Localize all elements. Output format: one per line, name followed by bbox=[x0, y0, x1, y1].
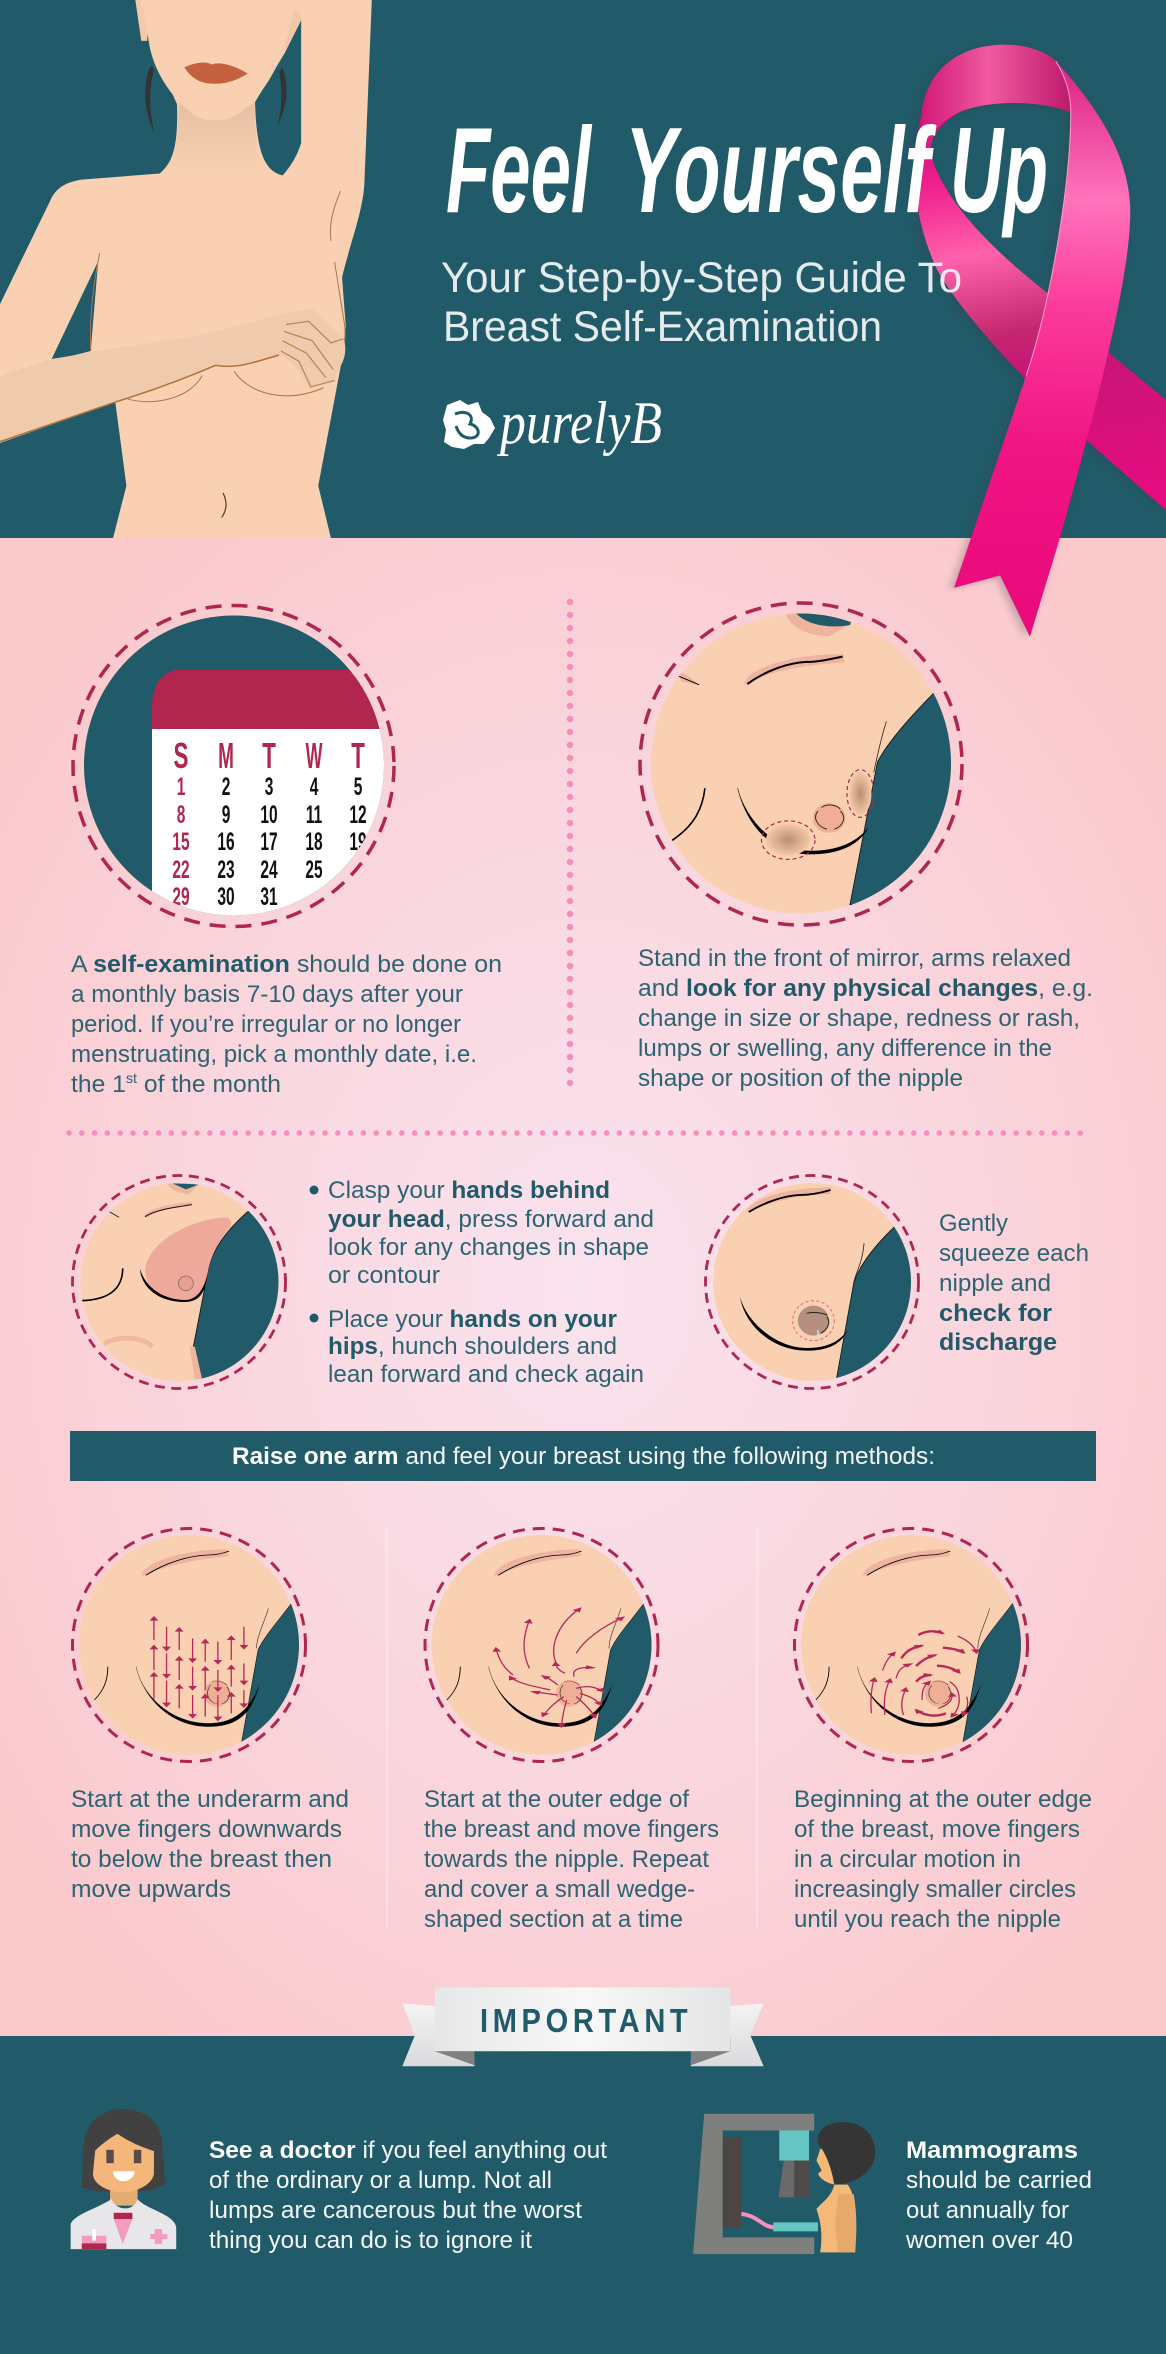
text: circular method: until you reach the nipple bbox=[794, 1906, 1061, 1933]
title: Feel bbox=[446, 102, 592, 238]
text: self-examination: menstruating, pick a monthly date, i.e. bbox=[71, 1041, 477, 1068]
ribbon bbox=[915, 45, 1166, 637]
text: self-examination: a monthly basis 7-10 days after your bbox=[71, 981, 463, 1008]
icon: mammogram machine bbox=[693, 2114, 875, 2254]
dashed ring bbox=[73, 606, 394, 926]
text: look for changes bbox=[638, 945, 1093, 1092]
text: wedge method: towards the nipple. Repeat bbox=[424, 1846, 709, 1873]
ribbon front strap bbox=[954, 61, 1130, 637]
calendar sheet: 23 bbox=[217, 856, 235, 884]
calendar sheet: 18 bbox=[305, 828, 323, 856]
text: wedge method: and cover a small wedge- bbox=[424, 1876, 695, 1903]
text: mammograms: Mammograms bbox=[906, 2137, 1078, 2164]
text: wedge method: the breast and move fingers bbox=[424, 1816, 719, 1843]
panel: vertical method bbox=[72, 1528, 312, 1762]
calendar sheet: 22 bbox=[172, 856, 190, 884]
text: see a doctor: lumps are cancerous but the worst bbox=[209, 2197, 582, 2224]
text: hands behind head and on hips: or contour bbox=[328, 1262, 440, 1289]
ribbon band behind bbox=[915, 110, 1166, 510]
panel: calendar bbox=[73, 606, 402, 929]
text: hands behind head and on hips: Place your hands on your bbox=[328, 1306, 617, 1333]
calendar sheet: S bbox=[174, 737, 188, 776]
text: circular method bbox=[794, 1786, 1092, 1933]
text: wedge method bbox=[424, 1786, 719, 1933]
text: mammograms: should be carried bbox=[906, 2167, 1092, 2194]
icon: doctor bbox=[71, 2109, 176, 2249]
calendar sheet: T bbox=[262, 737, 276, 776]
logo: purelyB: purelyB bbox=[497, 390, 662, 456]
text: look for changes: and look for any physical changes , e.g. bbox=[638, 975, 1093, 1002]
text: self-examination: of the month bbox=[137, 1071, 281, 1098]
arrows: spiral strokes bbox=[871, 1631, 976, 1717]
calendar sheet bbox=[152, 670, 384, 916]
calendar sheet: M bbox=[218, 737, 234, 777]
calendar sheet: 26 bbox=[349, 856, 367, 884]
text: self-examination bbox=[71, 951, 502, 1098]
text: check for discharge bbox=[939, 1210, 1089, 1356]
text: circular method: increasingly smaller circles bbox=[794, 1876, 1076, 1903]
dividers bbox=[386, 1528, 388, 1929]
text: hands behind head and on hips: Clasp your hands behind bbox=[328, 1177, 610, 1204]
banner: important: IMPORTANT bbox=[480, 2002, 688, 2039]
text: wedge method: Start at the outer edge of bbox=[424, 1786, 689, 1813]
text: mammograms: out annually for bbox=[906, 2197, 1069, 2224]
panel: circular method bbox=[794, 1528, 1034, 1762]
subtitle: Your Step-by-Step Guide To bbox=[441, 254, 962, 302]
lump right bbox=[849, 772, 871, 815]
text: self-examination: period. If you’re irregular or no longer bbox=[71, 1011, 461, 1038]
text: hands behind head and on hips: look for any changes in shape bbox=[328, 1234, 649, 1261]
lump left bbox=[766, 824, 811, 856]
text: self-examination: st bbox=[126, 1070, 137, 1086]
calendar sheet: 10 bbox=[260, 801, 278, 829]
text: circular method: of the breast, move fingers bbox=[794, 1816, 1080, 1843]
title: Up bbox=[950, 102, 1048, 238]
text: vertical method: to below the breast then bbox=[71, 1846, 332, 1873]
calendar sheet: 30 bbox=[217, 883, 235, 911]
text: vertical method: move fingers downwards bbox=[71, 1816, 342, 1843]
calendar sheet: 17 bbox=[260, 828, 278, 856]
banner: important bbox=[402, 1987, 764, 2066]
text: see a doctor: See a doctor if you feel anything out bbox=[209, 2137, 607, 2164]
calendar sheet: 3 bbox=[265, 773, 273, 801]
calendar sheet: 2 bbox=[222, 773, 230, 801]
panel: wedge method bbox=[425, 1528, 665, 1762]
text: see a doctor bbox=[209, 2137, 607, 2254]
calendar sheet: 11 bbox=[306, 801, 322, 829]
subtitle bbox=[441, 254, 962, 351]
illustration: woman bbox=[0, 0, 372, 538]
calendar sheet: 8 bbox=[177, 801, 185, 829]
calendar sheet: 1 bbox=[177, 773, 185, 801]
ribbon loop top bbox=[922, 45, 1071, 163]
arrows: radial strokes bbox=[496, 1608, 623, 1727]
text: look for changes: lumps or swelling, any difference in the bbox=[638, 1035, 1052, 1062]
panel: mirror check bbox=[640, 603, 967, 925]
calendar sheet: 16 bbox=[217, 828, 235, 856]
text: see a doctor: thing you can do is to ignore it bbox=[209, 2227, 532, 2254]
calendar sheet: 4 bbox=[310, 773, 319, 801]
text: hands behind head and on hips: your head, press forward and bbox=[328, 1206, 654, 1233]
banner bar: raise one arm bbox=[70, 1431, 1096, 1481]
text: hands behind head and on hips: hips, hunch shoulders and bbox=[328, 1333, 617, 1360]
text: check for discharge: check for bbox=[939, 1300, 1052, 1327]
calendar sheet: 5 bbox=[354, 773, 362, 801]
pink body panel bbox=[0, 538, 1166, 2036]
calendar sheet: 12 bbox=[349, 801, 367, 829]
text: check for discharge: nipple and bbox=[939, 1270, 1051, 1297]
text: circular method: Beginning at the outer edge bbox=[794, 1786, 1092, 1813]
calendar sheet: 29 bbox=[172, 883, 190, 911]
text: self-examination: the 1 bbox=[71, 1071, 124, 1098]
footer panel bbox=[0, 2036, 1166, 2354]
panel: hands behind head bbox=[72, 1176, 290, 1388]
title bbox=[446, 102, 1048, 238]
text: vertical method: Start at the underarm and bbox=[71, 1786, 349, 1813]
text: wedge method: shaped section at a time bbox=[424, 1906, 683, 1933]
text: check for discharge: discharge bbox=[939, 1329, 1057, 1356]
title: Yourself bbox=[625, 102, 937, 238]
text: look for changes: change in size or shape, redness or rash, bbox=[638, 1005, 1080, 1032]
logo: purelyB bbox=[443, 390, 662, 456]
calendar sheet: 31 bbox=[260, 883, 278, 911]
panel: nipple discharge bbox=[706, 1176, 922, 1388]
calendar sheet: 9 bbox=[222, 801, 230, 829]
text: mammograms: women over 40 bbox=[905, 2227, 1073, 2254]
calendar sheet: T bbox=[351, 737, 365, 776]
text: self-examination: A self-examination should be done on bbox=[71, 951, 502, 978]
arrows: vertical strokes bbox=[154, 1617, 244, 1720]
calendar sheet: W bbox=[306, 736, 323, 777]
calendar sheet: 15 bbox=[172, 828, 190, 856]
text: check for discharge: Gently bbox=[939, 1210, 1008, 1237]
text: hands behind head and on hips bbox=[310, 1177, 654, 1388]
horizontal dotted divider bbox=[69, 1130, 1087, 1136]
text: see a doctor: of the ordinary or a lump. Not all bbox=[209, 2167, 552, 2194]
calendar sheet: 25 bbox=[305, 856, 323, 884]
calendar sheet: 24 bbox=[260, 856, 278, 884]
dashed ring bbox=[640, 603, 962, 925]
text: circular method: in a circular motion in bbox=[794, 1846, 1021, 1873]
text: vertical method bbox=[71, 1786, 349, 1903]
vertical dotted divider bbox=[567, 602, 573, 1086]
text: check for discharge: squeeze each bbox=[939, 1240, 1089, 1267]
text: hands behind head and on hips: lean forward and check again bbox=[328, 1361, 644, 1388]
text: look for changes: Stand in the front of mirror, arms relaxed bbox=[638, 945, 1071, 972]
calendar sheet: 19 bbox=[349, 828, 367, 856]
text: look for changes: shape or position of the nipple bbox=[638, 1065, 963, 1092]
text: vertical method: move upwards bbox=[71, 1876, 231, 1903]
banner bar: raise one arm: Raise one arm and feel your breast using the following methods: bbox=[232, 1443, 935, 1470]
text: mammograms bbox=[905, 2137, 1092, 2254]
subtitle: Breast Self-Examination bbox=[443, 303, 882, 351]
